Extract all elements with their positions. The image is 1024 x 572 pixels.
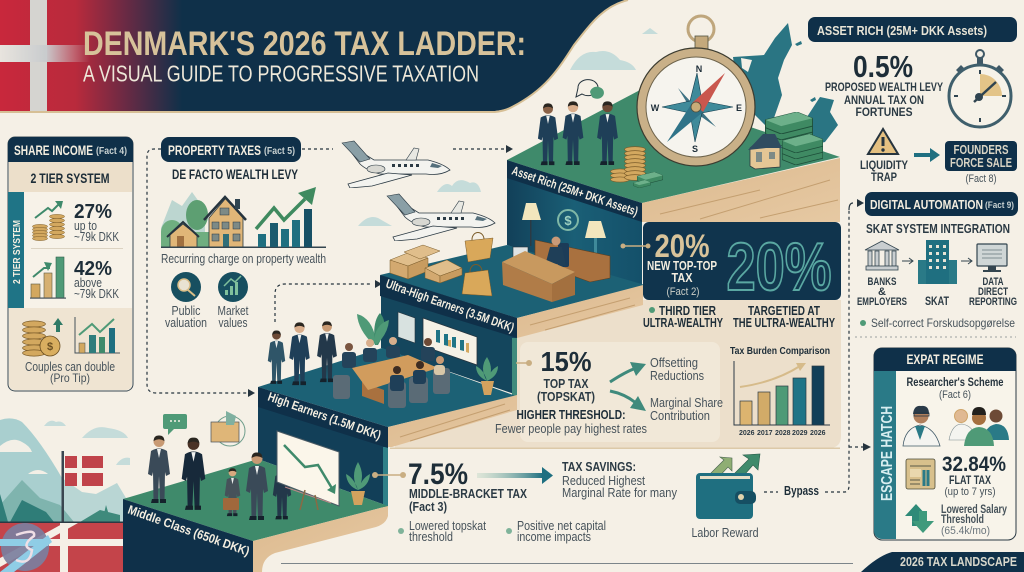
salary threshold note: Lowered Salary — [941, 504, 1007, 516]
founders force sale box: FOUNDERS — [954, 143, 1008, 157]
document emblem — [211, 411, 245, 446]
middle-bracket label: (Fact 3) — [409, 499, 447, 514]
0.5 percent figure: 0.5% — [853, 49, 913, 84]
icon: wallet with arrows — [696, 454, 760, 519]
targeted note — [733, 303, 835, 330]
seated team back row — [342, 337, 435, 368]
meeting room — [333, 312, 498, 408]
marginal share contribution: Marginal Share — [650, 395, 723, 410]
panel: 7.5 percent middle-bracket tax — [372, 458, 677, 544]
higher threshold: HIGHER THRESHOLD: — [516, 407, 626, 422]
potted plant — [346, 462, 370, 505]
higher threshold: Fewer people pay highest rates — [495, 421, 647, 436]
icon: researcher doctor — [903, 406, 940, 446]
icon: compass: S — [692, 144, 698, 154]
note: lowered topskat — [398, 519, 486, 544]
public valuation: Public — [172, 304, 200, 318]
recurring charge text: Recurring charge on property wealth — [161, 252, 326, 266]
map inlet highlights — [741, 58, 752, 72]
third tier note — [643, 303, 723, 330]
flag cross on banner — [0, 0, 90, 111]
boxes and shopping bags — [390, 232, 493, 296]
banks label — [857, 276, 907, 308]
flat tax label — [944, 475, 996, 498]
credenza — [535, 240, 610, 282]
researcher scheme heading: (Fact 6) — [939, 389, 971, 401]
wealth levy description: PROPOSED WEALTH LEVY — [825, 82, 943, 94]
offsetting reductions: Offsetting — [650, 355, 698, 370]
ultra-high office illustration — [502, 203, 610, 302]
market values — [218, 272, 249, 330]
scenery: bottom-left mountains — [0, 418, 130, 522]
arrow to tax savings — [477, 467, 553, 484]
icon: researcher group — [949, 407, 1009, 446]
expat heading: EXPAT REGIME — [906, 352, 984, 367]
icon: stopwatch — [949, 50, 1011, 127]
digital automation pill: (Fact 9) — [985, 200, 1014, 211]
digital automation pill — [865, 192, 1018, 216]
higher threshold — [495, 407, 647, 436]
tax savings: TAX SAVINGS: — [562, 459, 636, 474]
footer tab — [861, 552, 1024, 572]
icon: Denmark map — [733, 23, 838, 148]
panel: asset rich side — [808, 17, 1017, 185]
tax savings: Reduced Highest — [562, 473, 645, 488]
icon: compass — [637, 16, 755, 166]
liquidity trap label — [860, 158, 908, 184]
expat heading — [874, 348, 1016, 371]
share income heading: SHARE INCOME — [14, 143, 93, 158]
wealth levy description: ANNUAL TAX ON — [844, 95, 924, 107]
marginal share contribution: Contribution — [650, 408, 710, 423]
banks label: EMPLOYERS — [857, 296, 907, 308]
arrow — [902, 258, 913, 264]
note: positive net capital — [506, 519, 606, 544]
42 percent tier — [30, 257, 120, 301]
panel: expat regime — [874, 348, 1016, 540]
houses and rising chart illustration — [161, 187, 326, 248]
data reporting label: DIRECT — [978, 286, 1008, 298]
ultra-high label band — [380, 275, 517, 338]
bypass link — [764, 199, 871, 498]
bar chart: tax burden comparison: 2028 — [775, 430, 791, 437]
step: middle class — [123, 459, 388, 572]
connector — [372, 472, 406, 478]
middle class illustration — [148, 411, 370, 520]
people: middle class right trio — [223, 452, 291, 520]
bar chart: tax burden comparison: 2026 — [739, 430, 755, 437]
chairs and front-row team — [333, 356, 450, 408]
third tier note: ULTRA-WEALTHY — [643, 315, 723, 330]
people: middle class left pair — [148, 435, 205, 510]
share income heading: (Fact 4) — [96, 146, 127, 157]
bypass link: Bypass — [784, 483, 819, 498]
offsetting reductions: Reductions — [650, 368, 704, 383]
plant — [357, 313, 389, 345]
icon: bank — [865, 241, 899, 270]
big glowing 20 percent: 20% — [726, 229, 832, 305]
7.5 percent figure: 7.5% — [408, 458, 468, 491]
declining chart board — [277, 431, 339, 510]
bar chart: tax burden comparison: 2029 — [792, 430, 808, 437]
note: positive net capital: income impacts — [517, 530, 591, 544]
tan lower panel behind tax notes — [395, 300, 841, 448]
icon: compass: E — [736, 103, 742, 113]
flag banner with logo badge — [0, 522, 123, 572]
offsetting reductions — [650, 355, 704, 383]
27 percent tier — [32, 201, 120, 244]
banks label: BANKS — [868, 276, 896, 288]
42 percent tier: 42% — [74, 258, 112, 280]
arrowheads on dotted flow — [248, 145, 513, 397]
icon: up and down arrows — [905, 504, 934, 533]
27 percent tier: up to — [74, 219, 97, 233]
high earners wood side — [388, 395, 517, 447]
icon: data monitor — [977, 244, 1007, 272]
wall chart — [423, 318, 477, 365]
icon: newspaper — [906, 459, 935, 489]
wall poster — [398, 312, 415, 343]
tax savings — [562, 459, 677, 500]
property taxes pill: PROPERTY TAXES — [168, 143, 261, 158]
middle-bracket label — [409, 486, 527, 514]
liquidity trap label: TRAP — [871, 170, 897, 184]
couples pro tip: Couples can double — [25, 360, 115, 374]
icon: upper jet — [342, 141, 450, 188]
lamps — [522, 203, 606, 253]
tan rule under tax notes — [390, 448, 840, 449]
wealth levy description — [825, 82, 943, 119]
researcher scheme heading — [906, 375, 1004, 401]
42 percent tier: above — [74, 276, 102, 290]
ultra-high room wall — [381, 275, 517, 395]
couples pro tip — [9, 308, 132, 390]
tax savings: Marginal Rate for many — [562, 485, 677, 500]
monitor — [513, 247, 528, 263]
couples pro tip: (Pro Tip) — [50, 371, 90, 385]
asset rich pill: ASSET RICH (25M+ DKK Assets) — [817, 23, 987, 38]
public valuation — [165, 272, 207, 330]
header banner — [0, 0, 628, 112]
middle class green platform — [123, 459, 388, 541]
icon: compass: N — [696, 64, 702, 74]
step: ultra-high platform — [380, 245, 645, 396]
ultra-high label band: Ultra-High Earners (3.5M DKK) — [384, 277, 516, 335]
panel: share income — [8, 137, 133, 391]
title: DENMARK'S 2026 TAX LADDER: — [83, 25, 526, 63]
clouds — [358, 28, 658, 226]
targeted note: THE ULTRA-WEALTHY — [733, 315, 835, 330]
20 percent figure: 20% — [654, 228, 710, 264]
ultra-high teal platform — [380, 245, 645, 318]
property taxes pill: (Fact 5) — [264, 146, 295, 157]
arrow — [961, 258, 972, 264]
step: asset rich — [507, 90, 840, 290]
asset rich pill — [808, 17, 1017, 42]
icon: warning triangle — [868, 129, 898, 154]
new top-top tax label — [647, 259, 717, 298]
banks label: & — [878, 286, 886, 298]
executive — [546, 236, 569, 267]
42 percent tier: ~79k DKK — [74, 287, 120, 301]
high earners teal platform — [258, 348, 516, 427]
icon: compass: W — [651, 103, 660, 113]
high earners label band: High Earners (1.5M DKK) — [266, 390, 383, 443]
bottom rule — [281, 563, 853, 564]
de facto heading: DE FACTO WEALTH LEVY — [172, 167, 298, 182]
middle class front face and label: Middle Class (650k DKK) — [126, 503, 251, 559]
top tax label — [537, 376, 595, 404]
fact 8: (Fact 8) — [966, 173, 996, 185]
asset rich wood side — [642, 158, 840, 222]
digital automation pill: DIGITAL AUTOMATION — [870, 198, 983, 212]
new top-top tax label: TAX — [672, 271, 693, 285]
bar chart: tax burden comparison — [730, 345, 830, 437]
public valuation: valuation — [165, 316, 207, 330]
people: high earners group — [268, 321, 337, 385]
labor reward label: Labor Reward — [692, 525, 758, 540]
arrows to outcomes — [610, 362, 646, 411]
note: lowered topskat: threshold — [409, 530, 453, 544]
asset rich label band: Asset Rich (25M+ DKK Assets) — [510, 164, 640, 219]
asset rich room wall — [507, 160, 642, 290]
escape hatch sidebar — [874, 371, 896, 539]
flat tax label: (up to 7 yrs) — [944, 486, 996, 498]
asset rich label band — [507, 160, 642, 222]
data reporting label: DATA — [982, 276, 1004, 288]
ladder staircase — [123, 90, 840, 572]
note: positive net capital: Positive net capital — [517, 519, 606, 533]
tier band — [9, 162, 132, 192]
new top-top tax label: (Fact 2) — [666, 286, 700, 298]
icon: cash stacks and house — [748, 112, 823, 169]
Danish flag on pole — [62, 451, 103, 523]
arrow to founders — [914, 148, 940, 162]
asset rich green platform — [507, 90, 840, 203]
teal sidebar: 2 TIER SYSTEM — [12, 220, 23, 284]
note: lowered topskat: Lowered topskat — [409, 519, 486, 533]
flat tax label: FLAT TAX — [949, 475, 991, 487]
couples pro tip: $ — [47, 341, 53, 353]
speech bubble — [163, 414, 187, 435]
teal sidebar — [8, 192, 24, 308]
skat label: SKAT — [925, 294, 950, 308]
panel: property taxes — [161, 137, 326, 330]
dotted flow: property taxes to high earners — [147, 149, 505, 393]
27 percent tier: ~79k DKK — [74, 230, 120, 244]
panel: digital automation — [855, 192, 1018, 337]
middle-bracket label: MIDDLE-BRACKET TAX — [409, 486, 527, 501]
subtitle: A VISUAL GUIDE TO PROGRESSIVE TAXATION — [83, 60, 479, 86]
dollar medallion: $ — [564, 213, 572, 228]
icon: lower jet — [387, 194, 495, 241]
connector — [620, 244, 650, 248]
potted plant — [476, 357, 498, 395]
chart title: Tax Burden Comparison — [730, 345, 830, 357]
market values: Market — [218, 304, 249, 318]
top tax label: (TOPSKAT) — [537, 389, 595, 404]
data reporting label — [969, 276, 1017, 308]
conference table — [352, 355, 438, 404]
32.84 percent figure: 32.84% — [942, 453, 1006, 476]
market values: values — [218, 316, 248, 330]
icon: skat building — [918, 240, 957, 284]
third tier note: THIRD TIER — [659, 303, 716, 318]
escape hatch sidebar: ESCAPE HATCH — [879, 406, 896, 501]
salary threshold note: Threshold — [941, 514, 984, 526]
ultra-high wood side — [517, 285, 643, 338]
tier band: 2 TIER SYSTEM — [30, 170, 110, 186]
high earners room wall — [258, 387, 388, 506]
founders force sale box — [945, 141, 1017, 171]
desk — [502, 251, 575, 302]
top tax label: TOP TAX — [544, 376, 589, 391]
people: asset rich group — [538, 80, 618, 165]
wealth levy description: FORTUNES — [856, 107, 913, 119]
share income heading — [8, 137, 133, 162]
bar chart: tax burden comparison: 2017 — [757, 430, 773, 437]
salary threshold note: (65.4k/mo) — [941, 525, 990, 537]
targeted note: TARGETIED AT — [748, 303, 820, 318]
marginal share contribution — [650, 395, 723, 423]
middle class wood side — [253, 506, 388, 572]
new top-top tax label: NEW TOP-TOP — [647, 259, 717, 273]
liquidity trap label: LIQUIDITY — [860, 158, 908, 172]
panel: 20 percent tax — [620, 222, 841, 305]
connector — [516, 360, 532, 366]
icon: coin stacks — [610, 147, 663, 188]
panel: 15 percent top tax — [495, 342, 723, 442]
salary threshold note — [941, 504, 1007, 537]
bar chart: tax burden comparison: 2026 — [810, 430, 826, 437]
step: high earners platform — [258, 348, 517, 507]
27 percent tier: 27% — [74, 201, 112, 223]
property taxes pill — [161, 137, 301, 162]
15 percent figure: 15% — [540, 346, 592, 377]
